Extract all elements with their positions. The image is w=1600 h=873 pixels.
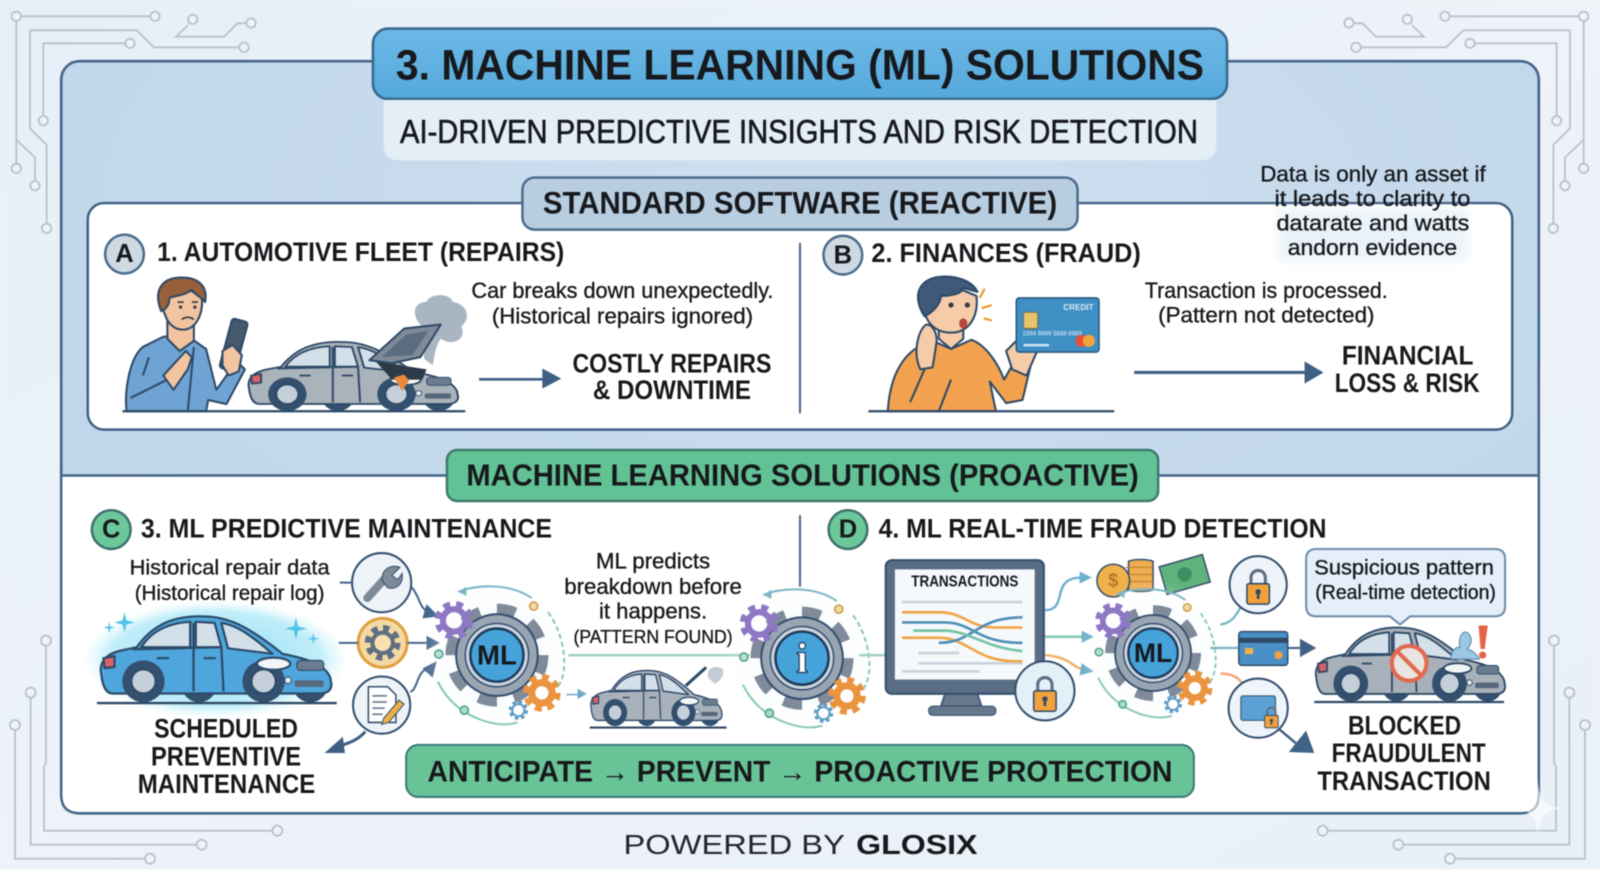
icon: cash [1159,555,1210,594]
outcome: financial loss: FINANCIAL [1342,340,1473,370]
icon: transactions monitor [886,560,1044,715]
outcome: blocked transaction: TRANSACTION [1317,766,1491,796]
heading: automotive fleet: 1. AUTOMOTIVE FLEET (REPAIRS) [157,237,564,267]
flow arrows [1045,578,1249,694]
callout: suspicious pattern [1306,549,1505,624]
icon: ML gear: ML [477,639,517,670]
text: car breaks down: Car breaks down unexpectedly. [471,278,773,303]
text: ML predicts [564,548,742,647]
title banner: 3. MACHINE LEARNING (ML) SOLUTIONS [396,42,1204,90]
text: scheduled preventive maintenance: MAINTENANCE [138,769,315,799]
icon: document and pencil [337,661,437,747]
outcome: costly repairs: & DOWNTIME [593,375,751,405]
outcome: financial loss: LOSS & RISK [1335,368,1480,398]
note text [1260,162,1487,260]
arrow small [566,689,587,699]
heading: predictive maintenance: 3. ML PREDICTIVE MAINTENANCE [141,514,552,544]
icon: card with lock [1229,679,1314,753]
note text: datarate and watts [1277,211,1469,236]
arrow: to scheduled maintenance [324,737,345,753]
heading: standard software [522,178,1078,230]
callout: suspicious pattern: Suspicious pattern [1314,555,1494,579]
text: ML predicts: breakdown before [564,574,742,599]
heading: ML solutions [447,450,1158,501]
connector line [568,654,750,656]
icon: credit card [1016,298,1099,352]
outcome: costly repairs: COSTLY REPAIRS [572,348,771,378]
callout: suspicious pattern: (Real-time detection) [1315,582,1496,604]
circuit traces bottom right [1318,636,1590,864]
note text: it leads to clarity to [1274,186,1470,211]
text: ML predicts: it happens. [599,598,707,623]
icon: coins: $ [1108,570,1118,591]
outcome: costly repairs [572,348,771,405]
icon: healthy blue car [83,600,348,718]
heading: finances: 2. FINANCES (FRAUD) [871,238,1141,268]
text: scheduled preventive maintenance: SCHEDULED [154,714,298,744]
icon: smoke [415,295,467,365]
sparkle [1512,782,1563,835]
icon: info gear [740,589,869,728]
panel: machine learning proactive [61,450,1539,813]
outcome: blocked transaction [1317,711,1491,796]
badge A [105,235,144,273]
badge D: D [839,516,857,544]
badge D [829,510,867,549]
text: transaction processed: Transaction is processed. [1145,278,1388,303]
icon: small car with open hood [590,667,727,728]
icon: blocked car [1314,626,1505,702]
panel: standard software reactive [88,162,1512,430]
footer: powered by [623,829,978,860]
icon: wrench [340,553,439,618]
icon: blue credit card with arrow [1239,632,1316,665]
icon: ML gear fraud [1095,589,1216,718]
circuit traces bottom left [10,636,282,864]
text: historical data: (Historical repair log) [135,581,324,605]
icon: coins [1097,559,1153,597]
text: car breaks down: (Historical repairs ignored) [492,303,753,328]
badge C [92,510,131,549]
text: ML predicts: (PATTERN FOUND) [573,626,733,647]
icon: worried man with phone [126,278,248,411]
icon: ML gear fraud: ML [1134,638,1172,668]
text: historical data: Historical repair data [130,555,330,579]
outcome: blocked transaction: BLOCKED [1348,711,1461,741]
arrow [480,369,560,388]
monitor heading: TRANSACTIONS [911,574,1018,591]
arrowheads [1080,571,1094,676]
heading: fraud detection: 4. ML REAL-TIME FRAUD DETECTION [879,514,1327,544]
outcome: blocked transaction: FRAUDULENT [1332,738,1486,768]
icon: monitor lock [1015,661,1074,720]
arrow [1135,362,1322,383]
banner: anticipate prevent protect [406,745,1194,797]
badge B [823,236,862,274]
note text: andorn evidence [1288,235,1457,260]
connector line [859,654,886,656]
text: scheduled preventive maintenance [138,714,315,799]
footer: powered by: GLOSIX [856,829,978,860]
icon: info gear: i [796,635,808,682]
subtitle [384,100,1216,160]
icon: lock circle [1230,556,1287,613]
heading: standard software: STANDARD SOFTWARE (REACTIVE) [543,184,1057,220]
text: scheduled preventive maintenance: PREVENTIVE [151,741,301,771]
footer: powered by: POWERED BY [623,829,845,860]
badge A: A [115,240,134,268]
heading: ML solutions: MACHINE LEARNING SOLUTIONS (PROACTIVE) [466,459,1139,493]
icon: credit card: 1594 9999 5898 8989 [1022,331,1083,338]
badge C: C [102,516,120,544]
text: transaction processed [1145,278,1388,327]
text: historical data [130,555,330,605]
icon: broken down car [249,324,458,411]
banner: anticipate prevent protect: ANTICIPATE → PREVENT → PROACTIVE PROTECTION [428,756,1172,789]
icon: shocked man with credit card [888,277,1037,411]
badge B: B [834,241,852,269]
subtitle: AI-DRIVEN PREDICTIVE INSIGHTS AND RISK DETECTION [400,114,1198,151]
circuit traces top left [12,12,256,233]
text: car breaks down [471,278,773,328]
outcome: financial loss [1335,340,1480,398]
icon: ML gear [435,586,564,724]
note text: Data is only an asset if [1260,162,1487,187]
text: ML predicts: ML predicts [596,548,710,573]
circuit traces top right [1344,12,1588,233]
icon: gear circle [339,618,440,667]
text: transaction processed: (Pattern not detected) [1158,302,1374,327]
title banner [373,29,1227,99]
ground line [122,410,465,412]
main panel [61,61,1539,813]
icon: credit card: CREDIT [1063,303,1094,312]
